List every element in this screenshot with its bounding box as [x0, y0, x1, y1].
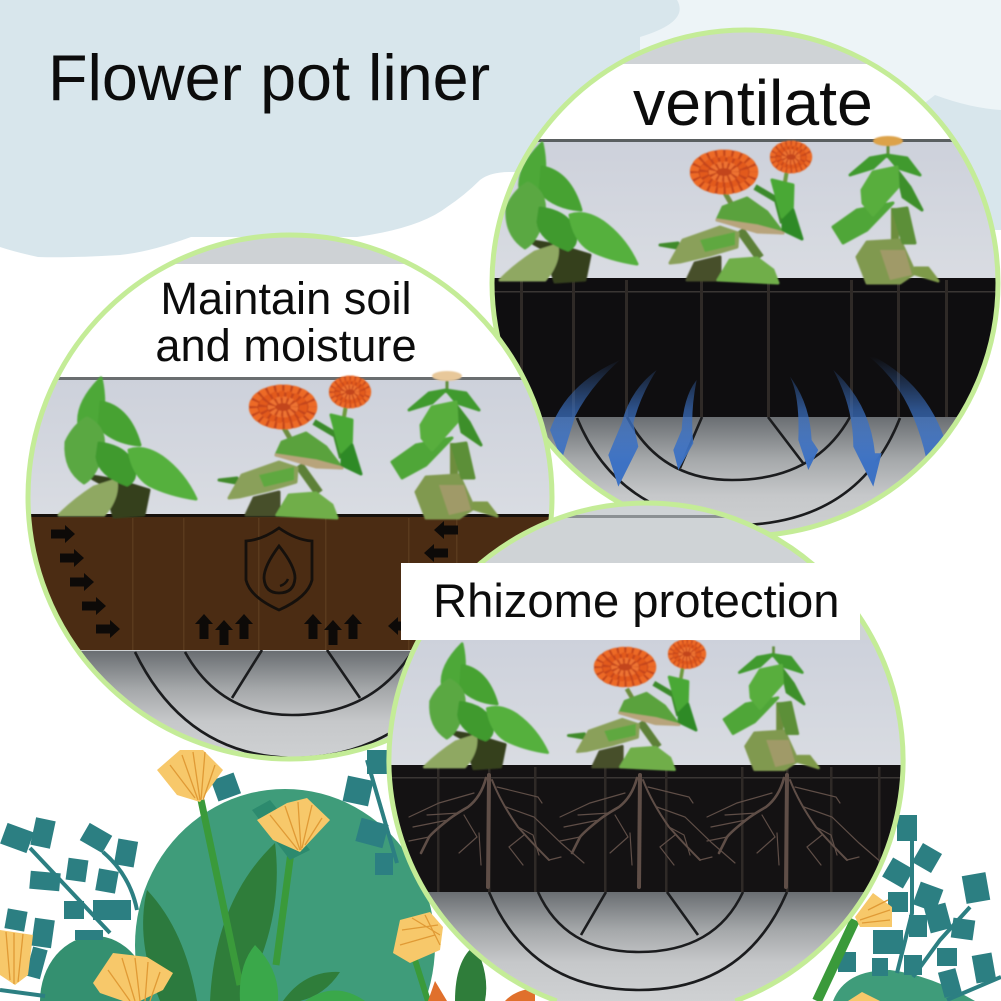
plants and flowers: [59, 371, 497, 518]
panel: maintain soil and moisture: [25, 235, 555, 760]
wire basket frame: [135, 650, 410, 758]
lower wall: [542, 417, 956, 514]
moisture arrows: [51, 521, 458, 645]
lower wall: [81, 651, 410, 734]
airflow arrows: [550, 350, 945, 487]
heading: maintain soil and moisture: and moisture: [155, 320, 417, 371]
panel: ventilate: [490, 28, 1001, 538]
brown planter: [25, 514, 555, 650]
label band: [401, 563, 860, 640]
heading: rhizome protection: Rhizome protection: [433, 575, 840, 628]
heading: ventilate: ventilate: [633, 67, 873, 139]
wire basket frame: [489, 892, 787, 990]
heading: maintain soil and moisture: Maintain soil: [160, 273, 412, 324]
plants and flowers: [500, 136, 938, 283]
garden illustration: [0, 750, 1001, 1001]
panel: rhizome protection: [389, 503, 903, 1001]
wire basket frame: [577, 417, 900, 525]
title: Flower pot liner: [48, 41, 490, 114]
icon: shield with water drop: [246, 528, 312, 610]
black planter with roots: [389, 765, 903, 892]
black planter: [490, 278, 1001, 417]
plants and flowers: [424, 639, 819, 770]
panel border: [389, 503, 903, 1001]
lower wall: [428, 892, 864, 980]
